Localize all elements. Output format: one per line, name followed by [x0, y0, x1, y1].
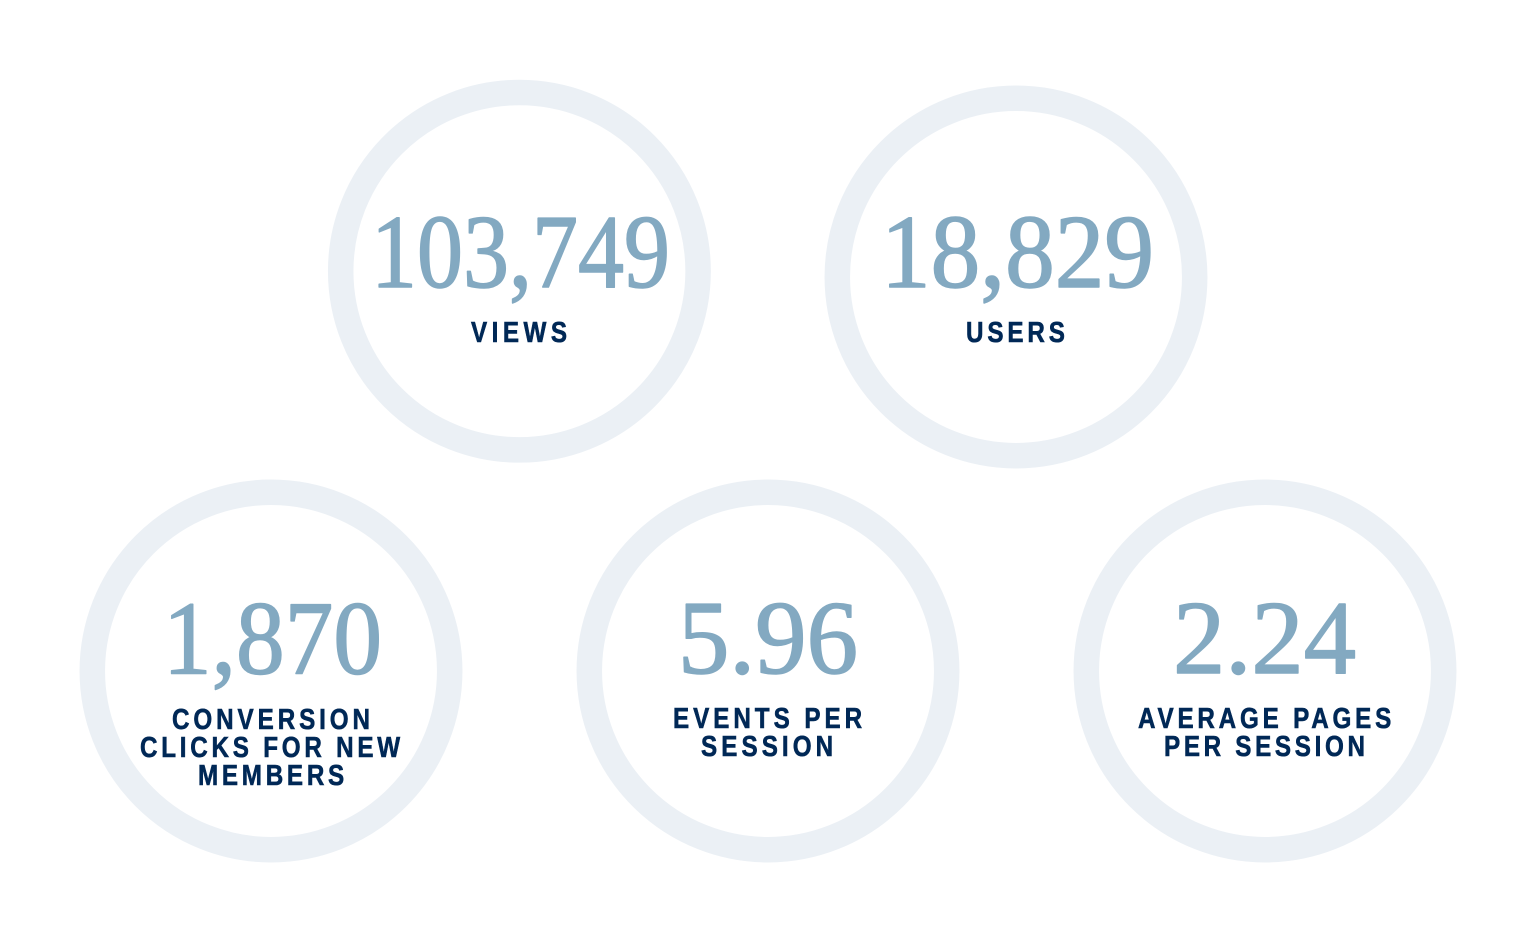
number: views: 103,749: [371, 193, 670, 310]
number: events per session: 5.96: [678, 579, 858, 696]
label: events per session: EVENTS PER: [673, 702, 862, 734]
label: events per session: [673, 702, 862, 762]
panel: average pages per session: [1086, 492, 1444, 850]
ring: conversion clicks: [92, 492, 450, 850]
ring: events per session: [589, 492, 947, 850]
number: users: 18,829: [881, 193, 1154, 310]
label: conversion clicks: CONVERSION: [172, 703, 370, 735]
label: views: VIEWS: [471, 316, 567, 348]
number: average pages per session: 2.24: [1173, 579, 1356, 696]
label: conversion clicks: MEMBERS: [198, 759, 344, 791]
ring: users: [837, 98, 1195, 456]
label: average pages per session: [1138, 702, 1391, 762]
label: events per session: SESSION: [701, 730, 833, 762]
label: conversion clicks: [140, 703, 400, 791]
panel: conversion clicks: [92, 492, 450, 850]
label: users: USERS: [966, 316, 1065, 348]
panel: users: [837, 98, 1195, 456]
number: conversion clicks: 1,870: [163, 580, 382, 696]
panel: views: [341, 93, 698, 450]
ring: views: [341, 93, 698, 450]
label: average pages per session: AVERAGE PAGES: [1138, 702, 1391, 734]
label: conversion clicks: CLICKS FOR NEW: [140, 731, 400, 763]
panel: events per session: [589, 492, 947, 850]
ring: average pages per session: [1086, 492, 1444, 850]
label: average pages per session: PER SESSION: [1164, 730, 1365, 762]
